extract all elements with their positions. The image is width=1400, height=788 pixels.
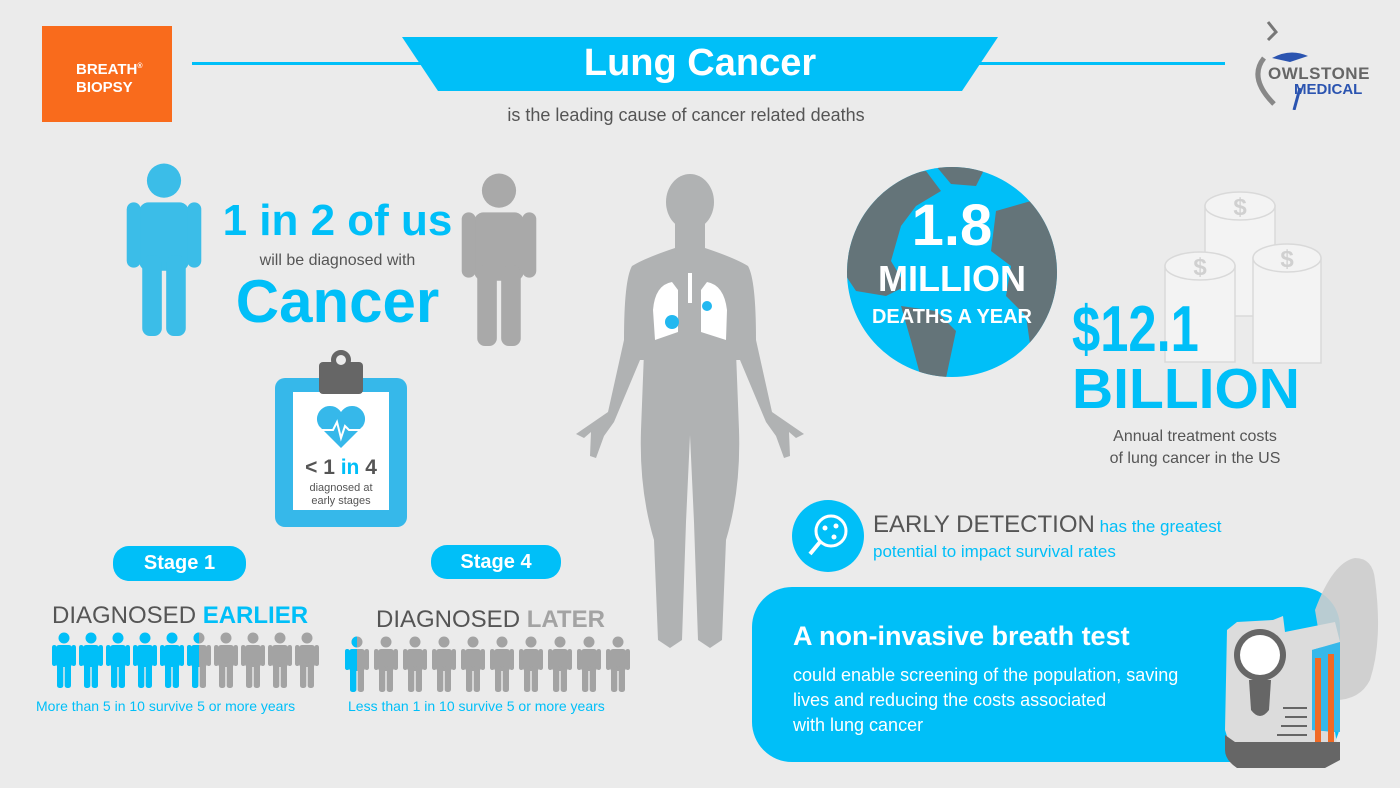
icon: magnifier — [792, 500, 864, 572]
coins: $ — [1280, 246, 1294, 273]
clipboard: early stages — [311, 495, 371, 507]
pill: stage 4: Stage 4 — [460, 551, 532, 573]
group: diagnosed earlier: DIAGNOSED EARLIER — [52, 602, 308, 629]
title banner: Lung Cancer — [584, 42, 816, 84]
logo: breath biopsy: BREATH® — [76, 61, 143, 78]
globe: 1.8 — [912, 193, 992, 258]
panel: breath test: with lung cancer — [793, 715, 923, 735]
panel: breath test — [752, 587, 1340, 762]
pill: stage 4 — [431, 545, 561, 579]
stat: 12.1 billion — [1072, 292, 1300, 421]
group: diagnosed later — [345, 606, 630, 714]
stat: 1 in 2: 1 in 2 of us — [223, 196, 452, 245]
stat: 12.1 billion: BILLION — [1072, 357, 1300, 421]
text: annual costs: Annual treatment costs — [1113, 428, 1277, 445]
text: early detection: EARLY DETECTION has the greatest — [873, 511, 1221, 538]
globe: DEATHS A YEAR — [872, 306, 1032, 328]
panel: breath test: A non-invasive breath test — [793, 621, 1130, 651]
stat: 1 in 2: Cancer — [236, 268, 439, 335]
panel: breath test: lives and reducing the costs associated — [793, 690, 1106, 710]
logo: breath biopsy — [42, 26, 172, 122]
subtitle: is the leading cause of cancer related deaths — [507, 105, 865, 125]
text: annual costs — [1110, 428, 1280, 467]
globe: MILLION — [878, 258, 1026, 299]
title banner — [192, 37, 1225, 91]
stat: 12.1 billion: $12.1 — [1072, 292, 1199, 365]
text: annual costs: of lung cancer in the US — [1110, 450, 1280, 467]
globe — [847, 167, 1057, 377]
stat: 1 in 2: will be diagnosed with — [260, 252, 415, 269]
icon: gray person — [462, 174, 536, 346]
group: diagnosed later: Less than 1 in 10 survive 5 or more years — [348, 698, 605, 714]
coins: $ — [1233, 194, 1247, 221]
icon: breath device — [1225, 558, 1378, 768]
clipboard: < 1 in 4 — [305, 456, 377, 479]
logo: owlstone medical — [1255, 21, 1370, 110]
panel: breath test: could enable screening of the population, saving — [793, 665, 1178, 685]
stat: 1 in 2 — [223, 196, 452, 335]
pill: stage 1 — [113, 546, 246, 581]
group: diagnosed earlier: More than 5 in 10 survive 5 or more years — [36, 698, 295, 714]
logo: owlstone medical: MEDICAL — [1294, 81, 1362, 98]
body silhouette — [576, 174, 804, 648]
group: diagnosed later: DIAGNOSED LATER — [376, 606, 605, 633]
clipboard — [275, 350, 407, 527]
group: diagnosed earlier — [36, 602, 319, 714]
icon: blue person — [126, 164, 202, 336]
logo: breath biopsy: BIOPSY — [76, 79, 133, 96]
clipboard: diagnosed at — [310, 482, 372, 494]
text: early detection — [873, 511, 1222, 561]
coins: $ — [1193, 254, 1207, 281]
text: early detection: potential to impact survival rates — [873, 542, 1116, 561]
coins — [1164, 191, 1322, 364]
pill: stage 1: Stage 1 — [144, 552, 215, 574]
logo: owlstone medical: OWLSTONE — [1268, 64, 1370, 83]
